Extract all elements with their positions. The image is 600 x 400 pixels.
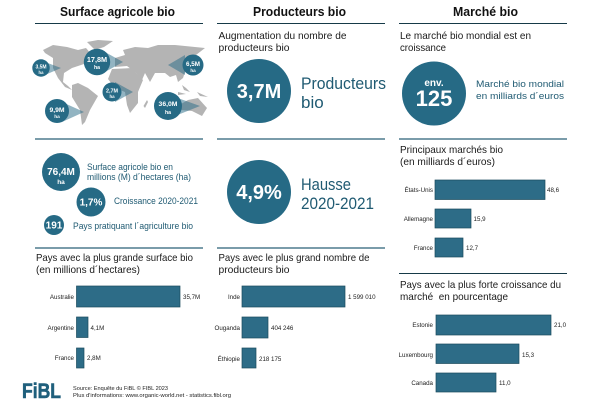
subheading: plus forte croissance du marché: Pays avec la plus forte croissance du	[400, 279, 561, 291]
bar chart: market growth by country: Estonie	[412, 322, 434, 329]
bar chart: producers by country	[215, 286, 376, 368]
callout: 3,5M ha	[32, 59, 61, 77]
bar chart: market growth by country: Canada	[411, 380, 434, 387]
stat: 3,7M producteurs bio: 3,7M	[237, 81, 281, 103]
subheading: plus forte croissance du marché	[400, 279, 561, 303]
heading: Producteurs bio: Producteurs bio	[253, 4, 346, 19]
stat: 76,4M ha: millions (M) d´hectares (ha)	[87, 171, 191, 182]
bar chart: producers by country: 218 175	[259, 356, 282, 363]
heading: Surface agricole bio: Surface agricole bio	[60, 4, 175, 19]
subheading: Augmentation du nombre de producteurs bio	[218, 30, 347, 54]
stat: env. 125: env.	[424, 78, 444, 89]
callout: 2,7M ha: 2,7M	[106, 88, 119, 94]
callout: 6,5M ha	[168, 54, 204, 76]
stat: env. 125	[402, 62, 564, 126]
subheading: plus grande surface bio: Pays avec la plus grande surface bio	[36, 252, 193, 264]
stat: 4,9% hausse: 4,9%	[236, 182, 282, 204]
source note	[73, 385, 231, 399]
bar chart: market growth by country: Luxembourg	[399, 352, 434, 359]
callout: 36,0M ha: ha	[165, 110, 171, 116]
stat: 4,9% hausse: 2020-2021	[301, 194, 374, 213]
subheading: marché bio mondial en croissance	[400, 30, 531, 54]
bar chart: markets by country	[404, 180, 560, 257]
stat: 191 countries: Pays pratiquant l´agriculture bio	[73, 220, 193, 231]
source note: Plus d'informations: www.organic-world.net - statistics.fibl.org	[73, 393, 231, 399]
bar chart: markets by country: 48,6	[547, 187, 560, 194]
bar chart: producers by country: 1 599 010	[348, 294, 376, 301]
callout: 9,9M ha: 9,9M	[49, 107, 65, 114]
bar chart: surface by country: 2,8M	[87, 355, 101, 362]
bar chart: markets by country: France	[414, 245, 434, 252]
bar chart: markets by country: États-Unis	[404, 187, 433, 194]
stat: 4,9% hausse	[227, 160, 374, 224]
stat: 76,4M ha: ha	[57, 179, 65, 186]
bar chart: surface by country: Argentine	[48, 325, 75, 332]
bar chart: market growth by country: 15,3	[522, 352, 535, 359]
stat: 4,9% hausse: Hausse	[301, 175, 351, 194]
subheading: plus grande surface bio: (en millions d´hectares)	[36, 264, 140, 276]
callout: 2,7M ha	[102, 82, 133, 102]
bar chart: surface by country: France	[55, 355, 75, 362]
callout: 17,8M ha: 17,8M	[87, 55, 107, 64]
callout: 3,5M ha: ha	[39, 70, 44, 75]
map landmasses	[43, 40, 208, 125]
stat: 191 countries: 191	[46, 220, 63, 232]
bar chart: producers by country: Ouganda	[215, 325, 241, 332]
subheading: Augmentation du nombre de producteurs bio: producteurs bio	[218, 42, 290, 54]
callout: 17,8M ha: ha	[94, 65, 100, 71]
subheading: marché bio mondial en croissance: croissance	[400, 42, 446, 54]
callout: 3,5M ha: 3,5M	[35, 64, 47, 70]
stat: 76,4M ha	[42, 153, 191, 191]
stat: 1,7% growth: 1,7%	[80, 198, 103, 208]
stat: env. 125: en milliards d´euros	[476, 90, 564, 101]
bar chart: producers by country: Éthiopie	[218, 356, 241, 363]
stat: 191 countries	[44, 215, 193, 235]
subheading: principaux marchés bio: Principaux marchés bio	[400, 144, 503, 156]
callout: 2,7M ha: ha	[109, 94, 115, 99]
stat: 1,7% growth	[76, 188, 198, 216]
subheading: plus grand nombre de producteurs: Pays avec le plus grand nombre de	[218, 252, 370, 264]
bar chart: market growth by country: 21,0	[554, 322, 567, 329]
subheading: Augmentation du nombre de producteurs bio: Augmentation du nombre de	[218, 30, 347, 42]
bar chart: surface by country: 35,7M	[183, 294, 200, 301]
bar chart: market growth by country	[399, 315, 567, 392]
bar chart: surface by country: 4,1M	[90, 325, 104, 332]
stat: 3,7M producteurs bio: Producteurs	[301, 74, 386, 93]
subheading: marché bio mondial en croissance: Le marché bio mondial est en	[400, 30, 531, 42]
callout: 36,0M ha: 36,0M	[159, 101, 178, 108]
stat: 3,7M producteurs bio	[227, 59, 386, 123]
bar chart: surface by country: Australie	[50, 294, 75, 301]
subheading: plus grande surface bio	[36, 252, 193, 276]
bar chart: markets by country: Allemagne	[404, 216, 434, 223]
world map with regional values	[32, 40, 208, 125]
subheading: plus forte croissance du marché: marché en pourcentage	[400, 291, 508, 303]
subheading: principaux marchés bio: (en milliards d´euros)	[400, 156, 495, 168]
bar chart: markets by country: 12,7	[466, 245, 479, 252]
heading: Marché bio: Marché bio	[453, 4, 518, 19]
callout: 6,5M ha: ha	[190, 68, 196, 73]
stat: env. 125: 125	[416, 86, 452, 111]
subheading: principaux marchés bio	[400, 144, 503, 168]
bar chart: producers by country: 404 246	[271, 325, 294, 332]
bar chart: markets by country: 15,9	[474, 216, 486, 223]
source note: Source: Enquête du FiBL © FIBL 2023	[73, 385, 168, 392]
callout: 17,8M ha	[84, 49, 123, 75]
callout: 9,9M ha: ha	[54, 114, 60, 120]
bar chart: surface by country	[48, 286, 200, 368]
subheading: plus grand nombre de producteurs	[218, 252, 370, 276]
stat: 76,4M ha: Surface agricole bio en	[87, 161, 173, 172]
subheading: plus grand nombre de producteurs: producteurs bio	[218, 264, 290, 276]
stat: 76,4M ha: 76,4M	[47, 167, 75, 178]
callout: 9,9M ha	[45, 99, 84, 123]
bar chart: market growth by country: 11,0	[499, 380, 511, 387]
stat: 3,7M producteurs bio: bio	[301, 93, 324, 112]
callout: 36,0M ha	[154, 92, 200, 120]
stat: 1,7% growth: Croissance 2020-2021	[114, 195, 198, 206]
callout: 6,5M ha: 6,5M	[186, 61, 200, 68]
stat: env. 125: Marché bio mondial	[476, 78, 564, 89]
bar chart: producers by country: Inde	[228, 294, 241, 301]
